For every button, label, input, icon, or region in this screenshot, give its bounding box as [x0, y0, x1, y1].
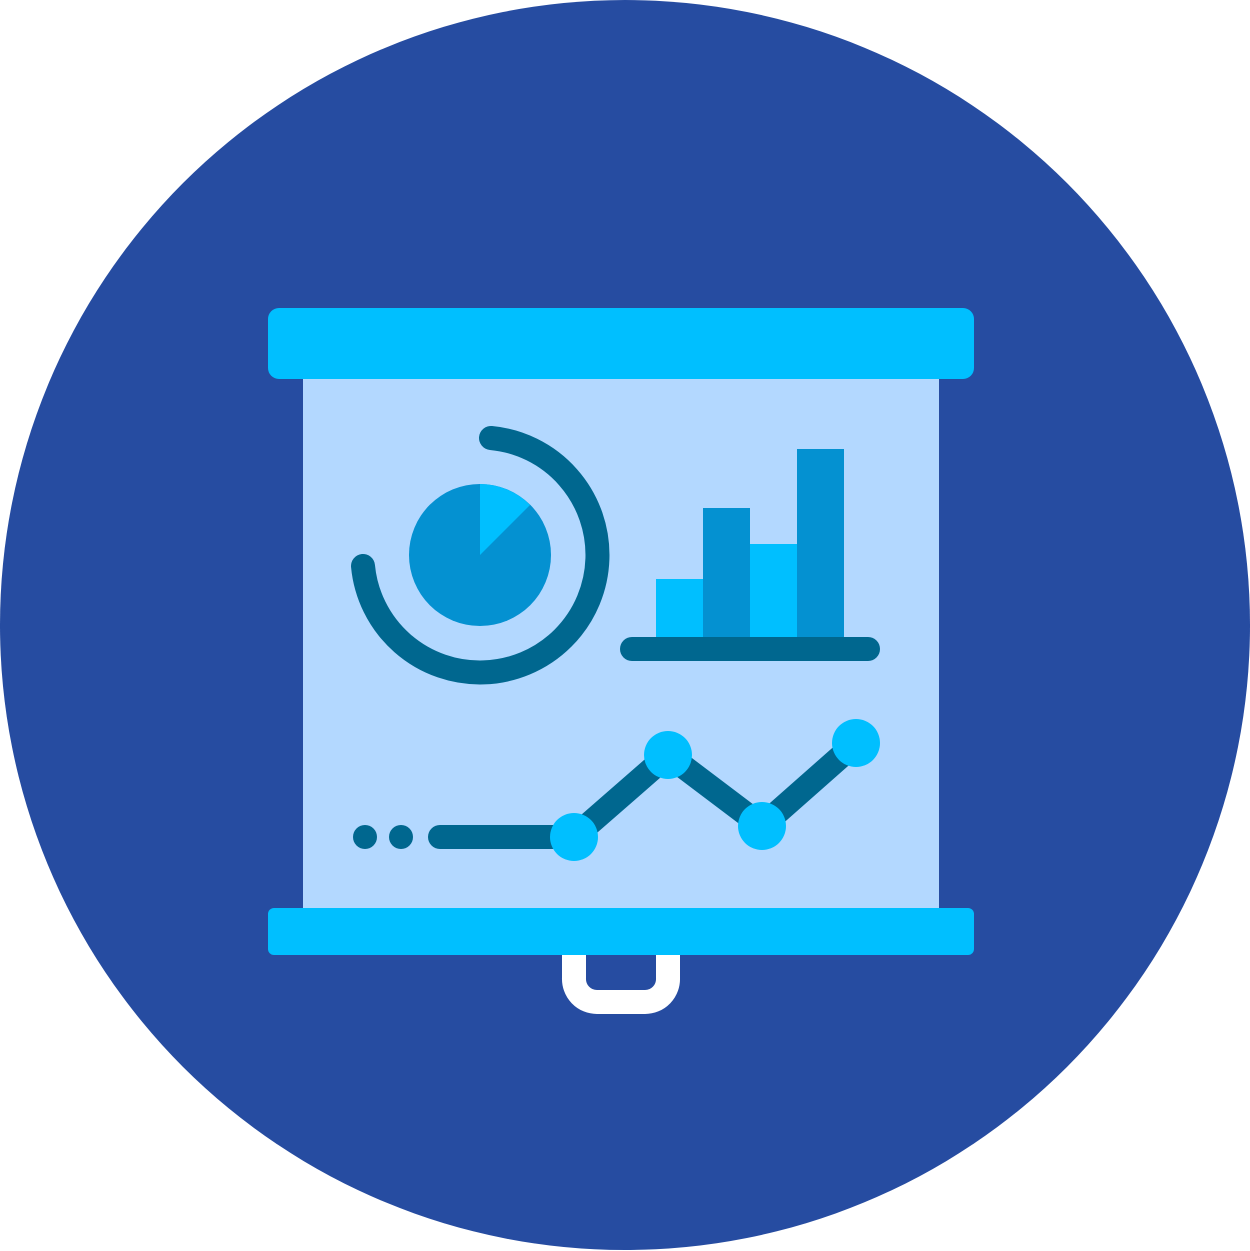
trend line — [440, 743, 856, 837]
pie slice — [480, 484, 530, 555]
bottom bar — [268, 908, 974, 955]
projection screen panel — [303, 370, 939, 915]
screen handle — [574, 950, 668, 1002]
top roller — [268, 308, 974, 379]
bar chart baseline — [620, 637, 880, 661]
line chart — [353, 719, 880, 861]
data points — [550, 719, 880, 861]
bar chart — [620, 449, 880, 661]
bars — [656, 449, 844, 639]
donut ring chart — [363, 438, 597, 672]
pie chart — [409, 484, 551, 626]
leading dots — [353, 825, 413, 849]
